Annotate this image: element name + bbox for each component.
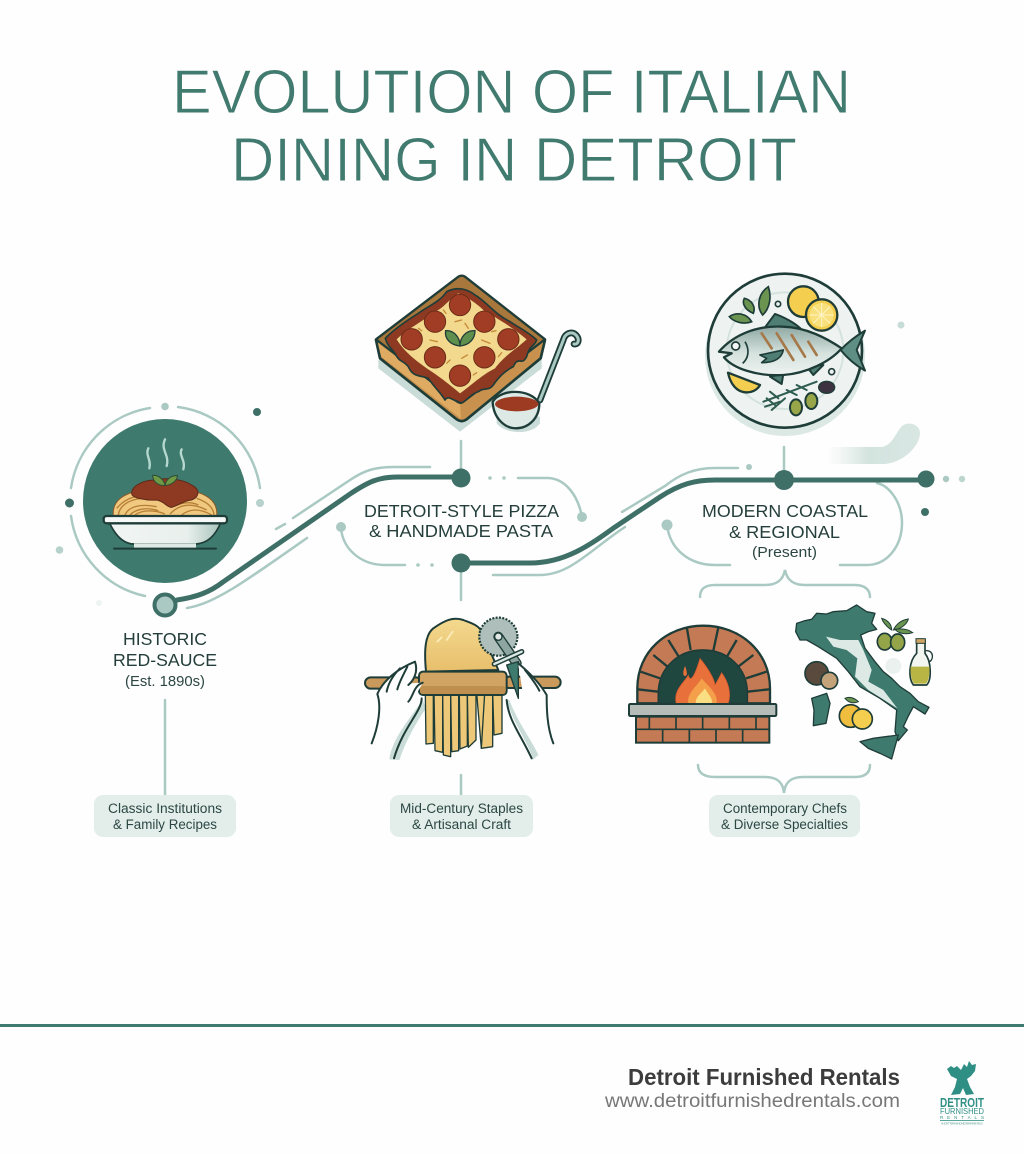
callout: mid-century staples: Mid-Century Staples (400, 801, 523, 816)
label: historic red-sauce: HISTORIC (123, 629, 207, 649)
callout: classic institutions: Classic Institutions (108, 801, 222, 816)
label: Detroit-style pizza (364, 501, 559, 541)
footer logo (940, 1061, 984, 1126)
footer logo: FURNISHED (940, 1107, 984, 1116)
footer logo: SHORT TERM AND MIDTERM RENTALS (941, 1122, 983, 1126)
footer brand text: www.detroitfurnishedrentals.com (604, 1091, 900, 1112)
label: modern coastal (702, 501, 868, 561)
callout: contemporary chefs (709, 795, 860, 837)
icon: hands rolling and cutting pasta (365, 618, 561, 760)
callout: mid-century staples: & Artisanal Craft (412, 817, 511, 832)
label: modern coastal: & REGIONAL (729, 522, 840, 542)
label: modern coastal: MODERN COASTAL (702, 501, 868, 521)
callout: classic institutions: & Family Recipes (113, 817, 217, 832)
label: historic red-sauce: RED-SAUCE (113, 650, 217, 670)
icon: brick pizza oven (629, 626, 776, 743)
icon: Italy map with ingredients (796, 605, 932, 759)
title: DINING IN DETROIT (231, 126, 797, 195)
label: historic red-sauce (113, 629, 217, 690)
timeline dots (336, 322, 965, 572)
icon: Detroit-style pizza and ladle (376, 276, 578, 432)
decorative smear (827, 424, 920, 464)
icon: fish plate (705, 274, 865, 436)
title: EVOLUTION OF ITALIAN (172, 58, 851, 127)
callout: contemporary chefs: Contemporary Chefs (723, 801, 847, 816)
timeline connectors (165, 441, 926, 795)
label: Detroit-style pizza: DETROIT-STYLE PIZZA (364, 501, 559, 521)
footer brand text (604, 1064, 900, 1112)
footer brand text: Detroit Furnished Rentals (628, 1064, 900, 1090)
label: Detroit-style pizza: & HANDMADE PASTA (369, 521, 553, 541)
callout: mid-century staples (390, 795, 533, 837)
footer rule (0, 1024, 1024, 1027)
label: modern coastal: (Present) (752, 544, 817, 561)
title (172, 58, 851, 195)
callout: classic institutions (94, 795, 236, 837)
icon: spaghetti bowl in teal circle (56, 403, 264, 616)
footer logo: RENTALS (940, 1115, 984, 1120)
footer logo: DETROIT (940, 1095, 984, 1110)
label: historic red-sauce: (Est. 1890s) (125, 673, 205, 690)
callout: contemporary chefs: & Diverse Specialties (721, 817, 848, 832)
